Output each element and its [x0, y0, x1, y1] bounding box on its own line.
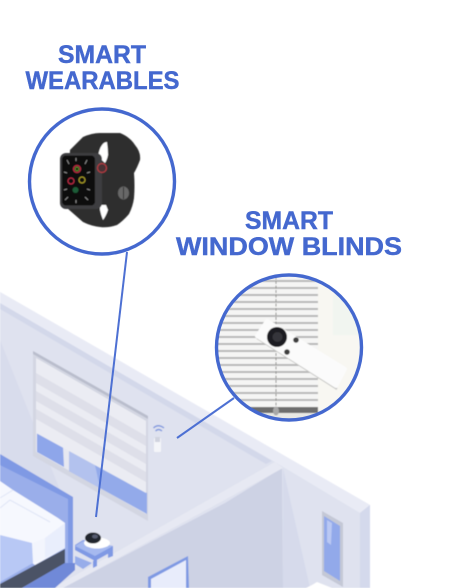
connector lines — [96, 252, 234, 517]
lower room window — [148, 556, 189, 588]
callout: smart window blinds — [216, 270, 368, 421]
wifi sensor — [154, 426, 164, 452]
photo: blinds and remote — [218, 278, 358, 418]
right room window — [322, 511, 343, 587]
bed — [0, 454, 75, 588]
duvet — [0, 535, 33, 582]
divider wall top — [53, 462, 283, 588]
nightstand with smart puck — [75, 532, 113, 569]
window panes — [37, 433, 64, 467]
heading: smart wearables — [26, 41, 180, 95]
right room wall — [283, 468, 360, 588]
outer wall end — [360, 505, 370, 588]
top wall band — [0, 292, 370, 513]
blind slats — [216, 280, 318, 401]
pillow shading — [0, 490, 50, 522]
bedroom window with blind — [33, 351, 148, 521]
heading: smart wearables: SMART — [58, 41, 146, 69]
heading: smart window blinds: WINDOW BLINDS — [176, 233, 402, 261]
headboard — [0, 454, 73, 566]
mattress — [0, 481, 65, 565]
heading: smart window blinds: SMART — [245, 207, 333, 235]
room wall faces — [0, 292, 370, 588]
white floor glimpse — [306, 582, 332, 588]
icon: remote control — [257, 321, 345, 389]
blind slats — [36, 358, 146, 493]
heading: smart window blinds — [176, 207, 402, 261]
lower left wall face — [63, 468, 283, 588]
isometric room — [0, 292, 370, 588]
bed base — [0, 549, 65, 588]
icon: smart watch — [60, 133, 140, 227]
callout: smart watch — [30, 109, 174, 254]
heading: smart wearables: WEARABLES — [26, 67, 180, 95]
